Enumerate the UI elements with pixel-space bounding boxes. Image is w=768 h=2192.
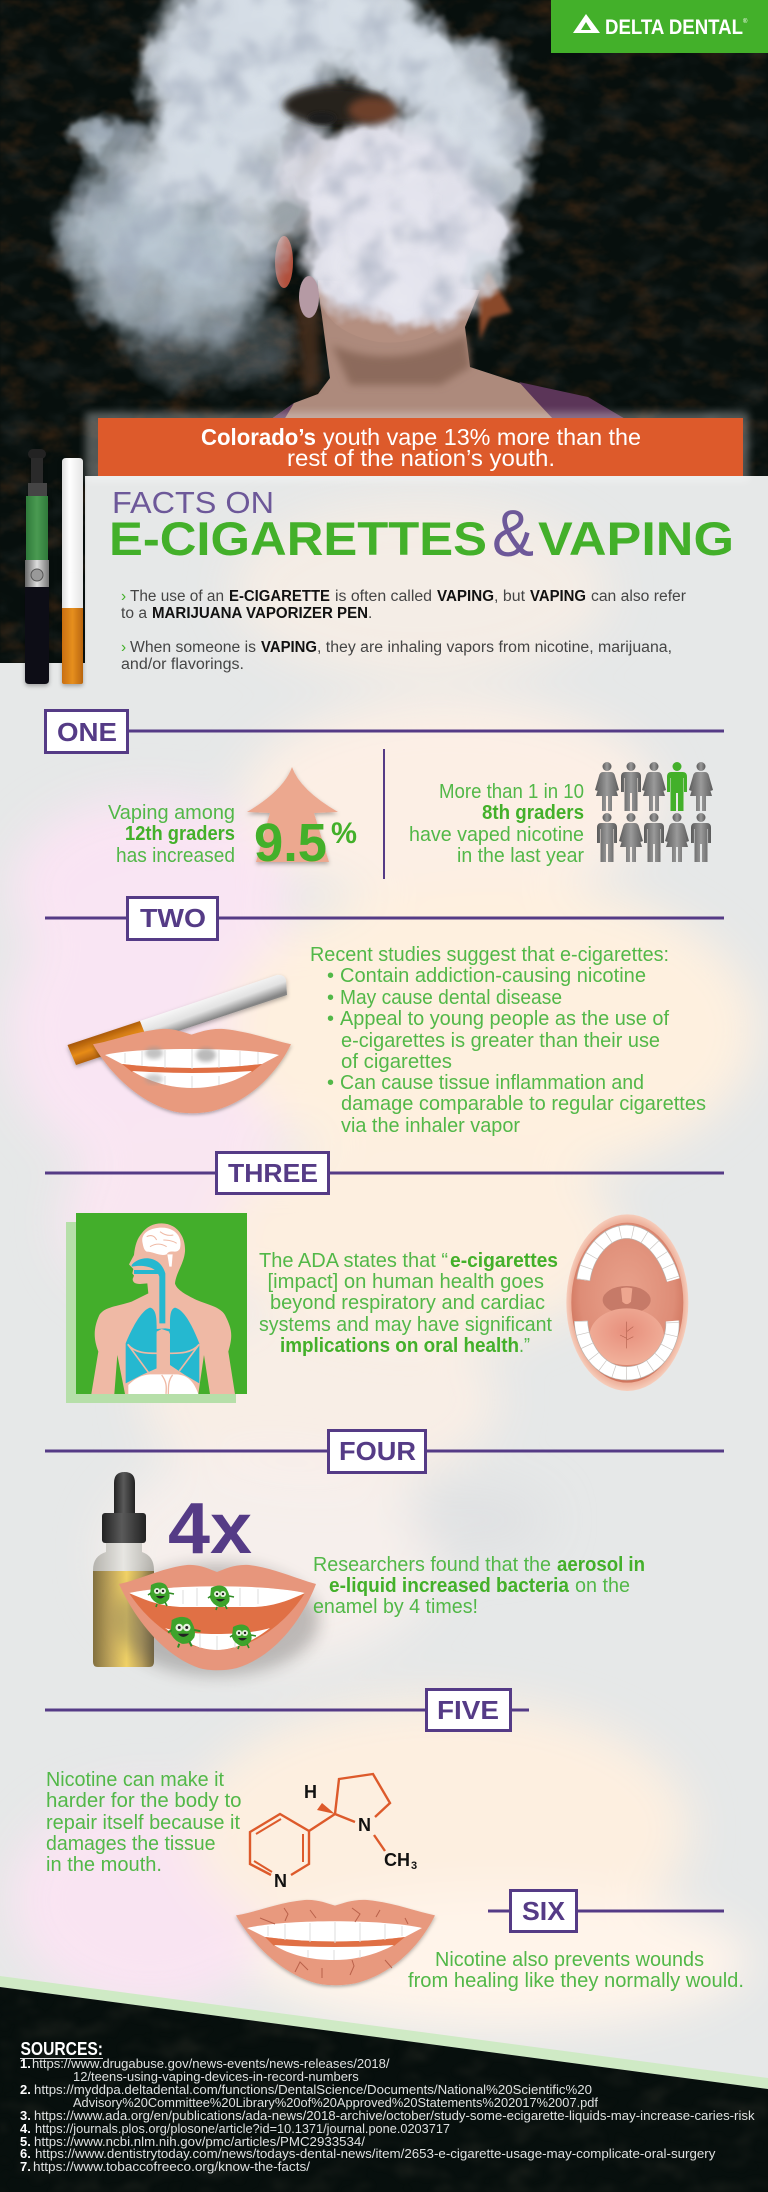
diagram: nicotine molecule: N — [274, 1871, 287, 1891]
sources: https://www.drugabuse.gov/news-events/news-releases/2018/ — [32, 2056, 390, 2071]
sources: 6. — [20, 2146, 31, 2161]
title: E-CIGARETTES — [109, 512, 487, 565]
section four text: aerosol in — [557, 1554, 645, 1576]
sources: SOURCES: — [20, 2039, 103, 2059]
diagram: nicotine molecule: CH — [384, 1850, 410, 1870]
intro text: , but — [494, 588, 526, 605]
section two text: May cause dental disease — [340, 987, 562, 1009]
diagram: nicotine molecule — [250, 1774, 417, 1891]
title: FACTS ON — [112, 485, 274, 520]
intro text: . — [368, 605, 372, 622]
illustration: human respiratory system — [66, 1213, 247, 1403]
arrow up with 9.5 percent: 9.5 — [254, 813, 327, 873]
section five text: in the mouth. — [46, 1854, 162, 1876]
arrow up with 9.5 percent — [247, 767, 357, 873]
section one: 8th graders text: have vaped nicotine — [409, 824, 584, 846]
intro text — [121, 588, 686, 673]
logo: Delta Dental: DELTA DENTAL — [605, 16, 743, 39]
intro text: and/or flavorings. — [121, 656, 244, 673]
sources: https://www.ada.org/en/publications/ada-news/2018-archive/october/study-some-ecigarette-liquids-may-increase-caries-risk — [34, 2108, 755, 2123]
section two text: Contain addiction-causing nicotine — [340, 965, 646, 987]
section two text: via the inhaler vapor — [341, 1115, 520, 1137]
section five header: FIVE — [437, 1695, 499, 1725]
section three header: THREE — [228, 1158, 318, 1188]
section three quote: e-cigarettes — [450, 1250, 558, 1272]
callout: Colorado statistic — [98, 418, 743, 476]
section three quote: The ADA states that “ — [259, 1250, 448, 1272]
section one: 8th graders text: 8th graders — [482, 802, 584, 824]
section six text: Nicotine also prevents wounds — [435, 1949, 704, 1971]
intro text: The use of an — [130, 588, 224, 605]
sources: 5. — [20, 2134, 31, 2149]
intro text: VAPING — [530, 588, 586, 605]
intro text: When someone is — [130, 639, 256, 656]
section four text: enamel by 4 times! — [313, 1596, 478, 1618]
title: VAPING — [538, 512, 734, 565]
intro text: is often called — [335, 588, 432, 605]
intro text: VAPING — [437, 588, 494, 605]
header vapor glow — [85, 412, 749, 482]
section two text: Appeal to young people as the use of — [340, 1008, 669, 1030]
logo: Delta Dental: ® — [743, 18, 748, 25]
sources: https://www.dentistrytoday.com/news/todays-dental-news/item/2653-e-cigarette-usage-may-complicate-oral-surgery — [35, 2146, 716, 2161]
section five text — [46, 1769, 242, 1876]
title — [109, 485, 734, 570]
section two text: Recent studies suggest that e-cigarettes: — [310, 944, 669, 966]
section one: 8th graders text: More than 1 in 10 — [439, 781, 584, 803]
diagram: nicotine molecule: 3 — [411, 1860, 417, 1872]
illustration: open mouth — [566, 1214, 688, 1391]
section one header: ONE — [57, 717, 117, 747]
callout: Colorado statistic: rest of the nation’s youth. — [287, 445, 555, 471]
section two header: TWO — [140, 903, 206, 933]
sources: 7. — [20, 2159, 31, 2174]
section five header — [45, 1690, 529, 1730]
sources: Advisory%20Committee%20Library%20of%20Approved%20Statements%202017%2007.pdf — [73, 2095, 598, 2110]
section two text: e-cigarettes is greater than their use — [341, 1030, 660, 1052]
section two text: • — [327, 1072, 334, 1094]
section two text: • — [327, 987, 334, 1009]
icon: 1 in 10 people — [595, 762, 713, 862]
stat: 4x: 4x — [168, 1489, 252, 1569]
section two text: damage comparable to regular cigarettes — [341, 1093, 706, 1115]
section two text: Can cause tissue inflammation and — [340, 1072, 644, 1094]
section four text — [313, 1554, 645, 1618]
section four text: e-liquid increased bacteria — [329, 1575, 570, 1597]
section one: 12th graders text: 12th graders — [125, 823, 235, 845]
section five text: harder for the body to — [46, 1790, 242, 1812]
sources: https://www.tobaccofreeco.org/know-the-facts/ — [33, 2159, 310, 2174]
section five text: Nicotine can make it — [46, 1769, 224, 1791]
section six text — [408, 1949, 744, 1992]
sources: 3. — [20, 2108, 31, 2123]
sources: 2. — [20, 2082, 31, 2097]
illustration: cigarette and lips — [68, 975, 291, 1113]
section three quote: implications on oral health — [280, 1335, 519, 1357]
section one: 8th graders text: in the last year — [457, 845, 584, 867]
title: & — [492, 496, 534, 570]
callout: Colorado statistic: youth vape 13% more than the — [323, 424, 641, 450]
intro text: , they are inhaling vapors from nicotine, marijuana, — [317, 639, 672, 656]
intro text: › — [121, 639, 126, 656]
section four header: FOUR — [339, 1436, 416, 1466]
intro text: MARIJUANA VAPORIZER PEN — [152, 605, 368, 622]
sources: 1. — [20, 2056, 31, 2071]
callout: Colorado statistic: Colorado’s — [201, 424, 316, 450]
logo: Delta Dental — [551, 0, 768, 53]
sources: https://www.ncbi.nlm.nih.gov/pmc/articles/PMC2933534/ — [34, 2134, 365, 2149]
diagram: nicotine molecule: N — [358, 1815, 371, 1835]
section six text: from healing like they normally would. — [408, 1970, 744, 1992]
diagram: nicotine molecule: H — [304, 1782, 317, 1802]
sources — [20, 2039, 755, 2174]
section six header — [488, 1890, 724, 1932]
hero photo: person exhaling vapor — [0, 0, 768, 663]
icon: cigarette — [62, 458, 83, 684]
intro text: › — [121, 588, 126, 605]
section two header — [45, 898, 724, 940]
divider — [383, 749, 385, 879]
illustration: lips with bacteria — [115, 1564, 319, 1676]
section three quote: beyond respiratory and cardiac — [270, 1292, 545, 1314]
arrow up with 9.5 percent: % — [331, 817, 357, 850]
sources: https://journals.plos.org/plosone/article?id=10.1371/journal.pone.0203717 — [35, 2121, 450, 2136]
footer dark background — [0, 1987, 768, 2192]
sources: 4. — [20, 2121, 31, 2136]
section two text: • — [327, 965, 334, 987]
icon: e-liquid bottle — [93, 1472, 154, 1667]
section four text: on the — [575, 1575, 630, 1597]
sources: 12/teens-using-vaping-devices-in-record-numbers — [73, 2069, 359, 2084]
section one: 12th graders text: Vaping among — [108, 802, 235, 824]
section two text: of cigarettes — [341, 1051, 452, 1073]
section one header — [46, 710, 724, 752]
section two text — [310, 944, 706, 1137]
intro text: can also refer — [591, 588, 686, 605]
section three quote: [impact] on human health goes — [268, 1271, 544, 1293]
section two text: • — [327, 1008, 334, 1030]
icon: e-cigarette — [25, 449, 49, 684]
intro text: VAPING — [261, 639, 317, 656]
section one: 12th graders text — [108, 802, 235, 867]
section three header — [45, 1152, 724, 1194]
section five text: repair itself because it — [46, 1812, 240, 1834]
section one: 12th graders text: has increased — [116, 845, 235, 867]
section four header — [45, 1430, 724, 1472]
section three quote — [259, 1250, 558, 1357]
intro text: E-CIGARETTE — [229, 588, 330, 605]
footer band — [0, 1976, 768, 2089]
intro text: to a — [121, 605, 147, 622]
section six header: SIX — [522, 1896, 566, 1926]
section one: 8th graders text — [409, 781, 584, 867]
illustration: cracked lips — [236, 1900, 435, 1985]
background panel with pastel smoke — [0, 476, 768, 2100]
section three quote: systems and may have significant — [259, 1314, 552, 1336]
section five text: damages the tissue — [46, 1833, 216, 1855]
section three quote: .” — [519, 1335, 530, 1357]
sources: https://myddpa.deltadental.com/functions/DentalScience/Documents/National%20Scientific%20 — [34, 2082, 592, 2097]
section four text: Researchers found that the — [313, 1554, 551, 1576]
